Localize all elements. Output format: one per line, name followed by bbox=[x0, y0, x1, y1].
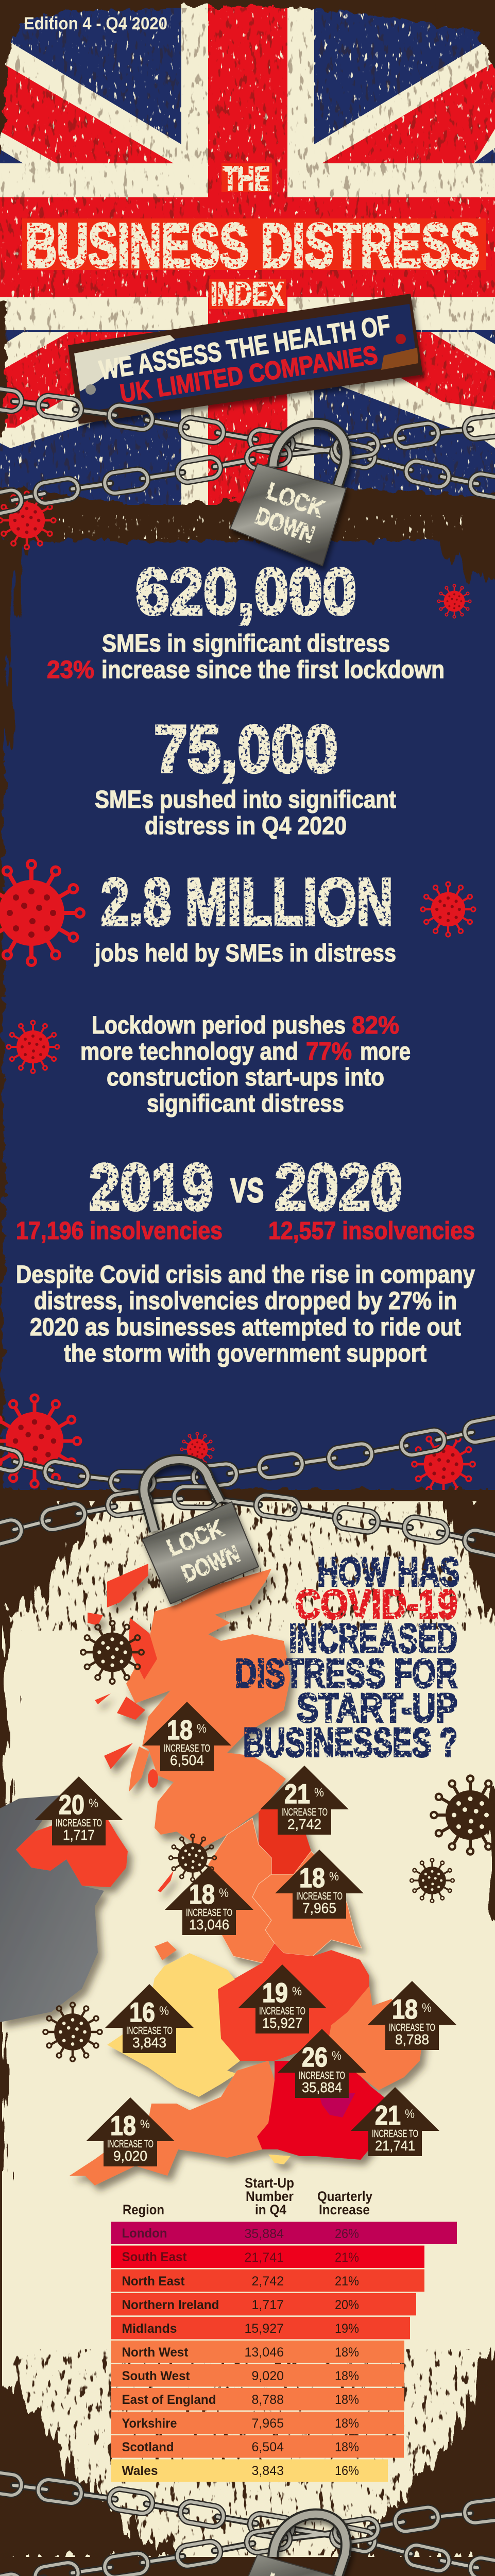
arrow: East of England: INCREASE TO bbox=[389, 2022, 435, 2033]
arrow: Midlands: 15,927 bbox=[262, 2015, 302, 2031]
row: Midlands: Midlands bbox=[122, 2321, 177, 2336]
arrow: South West: % bbox=[140, 2117, 150, 2131]
title: The Business Distress Index bbox=[22, 160, 486, 312]
arrow: Wales: 16 bbox=[129, 1997, 155, 2028]
arrow: Scotland: INCREASE TO bbox=[164, 1743, 210, 1754]
arrow: Scotland: 6,504 bbox=[170, 1752, 204, 1768]
row: South East bbox=[111, 2246, 424, 2268]
virus: right of 620,000 bbox=[437, 584, 471, 618]
row: Midlands: 19% bbox=[335, 2321, 359, 2336]
text: lockdown period: 77% bbox=[306, 1038, 352, 1065]
virus: map Hebrides bbox=[81, 1621, 144, 1684]
row: North East: 21% bbox=[335, 2274, 359, 2289]
row: North East: 2,742 bbox=[251, 2274, 284, 2289]
region: Isle of Man bbox=[158, 1871, 174, 1892]
arrow: Yorkshire: % bbox=[329, 1870, 339, 1884]
row: East of England: 8,788 bbox=[251, 2393, 284, 2407]
title: The Business Distress Index: THE bbox=[223, 160, 270, 197]
padlock: lower bbox=[230, 2514, 346, 2576]
arrow: South West: INCREASE TO bbox=[107, 2139, 153, 2150]
region: Isle of Wight bbox=[268, 2155, 291, 2164]
stat: 2.8 million bbox=[94, 865, 396, 967]
stat: 75,000: 75,000 bbox=[154, 712, 338, 786]
arrow: South West: 18 bbox=[110, 2111, 136, 2141]
row: London bbox=[111, 2222, 457, 2244]
text: despite covid crisis bbox=[16, 1261, 475, 1367]
padlock: middle bbox=[142, 1460, 259, 1604]
row: Wales: Wales bbox=[122, 2464, 158, 2478]
arrow: London: % bbox=[332, 2049, 342, 2063]
table header bbox=[123, 2175, 372, 2217]
arrow: Wales: % bbox=[159, 2004, 169, 2018]
row: Northern Ireland: 20% bbox=[335, 2298, 359, 2312]
row: London: London bbox=[122, 2226, 167, 2241]
row: Scotland: 18% bbox=[335, 2440, 359, 2454]
stat: 620,000: increase since the first lockdown bbox=[101, 656, 445, 684]
table header: Quarterly bbox=[317, 2189, 372, 2204]
virus: big left bbox=[0, 860, 84, 965]
panel: distressed union flag bbox=[0, 0, 495, 505]
row: South East: 21% bbox=[335, 2250, 359, 2265]
title: how has covid-19 increased distress: COVID-19 bbox=[295, 1581, 457, 1627]
table header: Increase bbox=[319, 2202, 370, 2217]
map of UK regions bbox=[0, 1564, 423, 2185]
row: Scotland: Scotland bbox=[122, 2440, 174, 2454]
arrow: Northern Ireland: % bbox=[89, 1797, 98, 1810]
row: Midlands: 15,927 bbox=[245, 2321, 284, 2336]
chains: lower bbox=[0, 2473, 495, 2576]
stat: 620,000: 23% bbox=[47, 656, 94, 684]
region: South West bbox=[70, 2061, 275, 2185]
arrow: Scotland: 18 bbox=[167, 1715, 193, 1745]
brown grunge around cream panel bbox=[0, 1494, 495, 2561]
arrow: North East: % bbox=[314, 1786, 324, 1800]
region: South East bbox=[257, 2061, 397, 2160]
row: South West: South West bbox=[122, 2369, 190, 2383]
arrow: South West bbox=[86, 2097, 175, 2166]
virus: map left lower bbox=[43, 2003, 102, 2061]
arrow: South East: % bbox=[405, 2107, 415, 2121]
arrow: Northern Ireland: 20 bbox=[59, 1790, 84, 1820]
stat: 620,000: 620,000 bbox=[135, 555, 356, 628]
arrow: North West: 18 bbox=[189, 1879, 215, 1910]
arrow: Wales bbox=[105, 1984, 194, 2053]
arrow: South East: INCREASE TO bbox=[372, 2128, 418, 2140]
row: East of England: East of England bbox=[122, 2393, 216, 2407]
arrow: London: INCREASE TO bbox=[299, 2070, 345, 2081]
title: how has covid-19 increased distress bbox=[235, 1549, 459, 1765]
row: South East: 21,741 bbox=[245, 2250, 284, 2265]
row: Wales: 16% bbox=[335, 2464, 359, 2478]
row: Yorkshire: 18% bbox=[335, 2416, 359, 2431]
stat: 2019 vs 2020: 2020 bbox=[275, 1150, 402, 1224]
row: London: 35,884 bbox=[245, 2227, 284, 2241]
stat: 75,000 bbox=[95, 712, 396, 840]
virus: lower right bbox=[412, 1433, 475, 1496]
arrow: North East bbox=[260, 1766, 349, 1835]
arrow: Scotland: % bbox=[197, 1722, 207, 1736]
arrow: North East: 21 bbox=[284, 1779, 310, 1809]
arrow: Wales: INCREASE TO bbox=[126, 2025, 173, 2037]
arrow: North West bbox=[165, 1866, 253, 1935]
virus: top left bbox=[0, 492, 56, 549]
row: East of England bbox=[111, 2388, 404, 2410]
arrow: Yorkshire: INCREASE TO bbox=[296, 1891, 343, 1902]
row: North West: 18% bbox=[335, 2345, 359, 2360]
row: Northern Ireland: 1,717 bbox=[251, 2298, 284, 2312]
region: Wales bbox=[107, 1953, 240, 2097]
arrow: South East: 21 bbox=[375, 2100, 401, 2131]
region: North West bbox=[208, 1818, 275, 1963]
arrow: London bbox=[278, 2029, 366, 2098]
arrow: London: 26 bbox=[302, 2042, 328, 2073]
row: North East bbox=[111, 2269, 424, 2292]
text: lockdown period: more bbox=[360, 1038, 411, 1065]
padlock: top: LOCK bbox=[263, 477, 328, 522]
text: edition: Edition 4 - Q4 2020 bbox=[24, 14, 167, 33]
region: East of England bbox=[328, 1986, 423, 2090]
sign: we assess the health: UK LIMITED COMPANIES bbox=[118, 340, 380, 408]
row: Midlands bbox=[111, 2317, 410, 2339]
text: lockdown period: 82% bbox=[352, 1012, 399, 1039]
row: Wales bbox=[111, 2460, 388, 2482]
stat: 2019 vs 2020: 12,557 insolvencies bbox=[268, 1217, 475, 1245]
region: Northern Ireland bbox=[16, 1818, 128, 1887]
arrow: Northern Ireland: INCREASE TO bbox=[56, 1818, 102, 1829]
arrow: Wales: 3,843 bbox=[132, 2035, 166, 2050]
row: East of England: 18% bbox=[335, 2393, 359, 2407]
arrow: Yorkshire: 7,965 bbox=[302, 1900, 336, 1916]
title: The Business Distress Index: INDEX bbox=[211, 276, 284, 312]
stat: 620,000: SMEs in significant distress bbox=[102, 630, 390, 657]
row: Scotland: 6,504 bbox=[251, 2440, 284, 2454]
arrow: East of England: 8,788 bbox=[395, 2031, 429, 2047]
row: South West: 18% bbox=[335, 2369, 359, 2383]
arrow: North West: % bbox=[219, 1886, 229, 1900]
stat: 2019 vs 2020: 2019 bbox=[89, 1150, 213, 1224]
table header: Number bbox=[246, 2189, 294, 2204]
stat: 620,000 bbox=[47, 555, 445, 684]
region: Anglesey bbox=[155, 1941, 177, 1960]
virus: map right big bbox=[431, 1775, 495, 1855]
region: Scotland bbox=[88, 1564, 291, 1848]
text: lockdown period: construction start-ups into bbox=[107, 1064, 384, 1091]
row: London: 26% bbox=[335, 2227, 359, 2241]
virus: small lower centre bbox=[180, 1432, 214, 1466]
padlock: middle: DOWN bbox=[178, 1540, 244, 1587]
rust streaks on navy panel bbox=[0, 531, 495, 1216]
arrow: South East bbox=[351, 2087, 439, 2156]
arrow: Scotland bbox=[143, 1702, 231, 1771]
padlock: middle: LOCK bbox=[163, 1515, 227, 1561]
sign: we assess the health bbox=[68, 294, 423, 424]
arrow: Yorkshire: 18 bbox=[299, 1863, 325, 1893]
arrow: North West: INCREASE TO bbox=[186, 1907, 232, 1919]
region: Ireland bbox=[0, 1795, 104, 2022]
row: South West bbox=[111, 2364, 404, 2386]
row: Scotland bbox=[111, 2435, 404, 2458]
arrow: East of England: 18 bbox=[392, 1994, 418, 2025]
rust border around flag bbox=[0, 0, 495, 546]
stat: 75,000: SMEs pushed into significant bbox=[95, 786, 396, 814]
stat: 2.8 million: 2.8 MILLION bbox=[101, 865, 393, 939]
row: North West bbox=[111, 2341, 404, 2363]
arrow: Midlands: INCREASE TO bbox=[259, 2006, 305, 2017]
arrow: Northern Ireland: 1,717 bbox=[63, 1827, 95, 1843]
sign: we assess the health: WE ASSESS THE HEALTH OF bbox=[97, 310, 392, 386]
chains: middle bbox=[0, 1417, 495, 1558]
region: North East bbox=[259, 1792, 311, 1874]
row: North West: 13,046 bbox=[245, 2345, 284, 2360]
stat: 2019 vs 2020: VS bbox=[230, 1171, 264, 1209]
panel: navy statistics background bbox=[3, 541, 495, 1490]
table: start-ups by region bbox=[111, 2175, 457, 2482]
chains: top bbox=[0, 389, 495, 518]
panel: cream map background bbox=[2, 1500, 495, 2557]
arrow: North West: 13,046 bbox=[189, 1917, 229, 1933]
row: North West: North West bbox=[122, 2345, 189, 2360]
region: Yorkshire bbox=[252, 1851, 362, 1956]
text: despite covid crisis: the storm with government support bbox=[64, 1340, 426, 1367]
text: lockdown period: Lockdown period pushes bbox=[92, 1012, 346, 1039]
virus: left of lockdown text bbox=[7, 1021, 59, 1073]
table header: in Q4 bbox=[255, 2202, 286, 2217]
virus: right of 2.8 million bbox=[421, 882, 475, 937]
stat: 2.8 million: jobs held by SMEs in distress bbox=[94, 940, 396, 967]
text: lockdown period: significant distress bbox=[147, 1090, 344, 1117]
row: North East: North East bbox=[122, 2274, 185, 2289]
row: Northern Ireland bbox=[111, 2293, 416, 2315]
row: Wales: 3,843 bbox=[251, 2464, 284, 2478]
row: Yorkshire: Yorkshire bbox=[122, 2416, 177, 2431]
arrow: London: 35,884 bbox=[302, 2079, 342, 2095]
arrow: East of England: % bbox=[422, 2001, 432, 2015]
table header: Start-Up bbox=[245, 2175, 294, 2191]
brown band above cream panel bbox=[0, 1490, 495, 1501]
padlock: top bbox=[230, 423, 346, 566]
stat: 2019 vs 2020 bbox=[16, 1150, 475, 1245]
region: Midlands bbox=[218, 1943, 369, 2061]
virus: map centre bbox=[169, 1834, 216, 1882]
region: London bbox=[319, 2093, 355, 2117]
text: lockdown period bbox=[80, 1012, 411, 1117]
arrow: North East: INCREASE TO bbox=[281, 1807, 328, 1818]
arrow: South West: 9,020 bbox=[113, 2148, 147, 2164]
virus: map right small bbox=[410, 1858, 454, 1903]
row: South East: South East bbox=[122, 2250, 187, 2264]
arrow: Yorkshire bbox=[275, 1850, 364, 1919]
row: Northern Ireland: Northern Ireland bbox=[122, 2298, 219, 2312]
text: lockdown period: more technology and bbox=[80, 1038, 298, 1065]
row: Yorkshire bbox=[111, 2412, 404, 2434]
padlock: top: DOWN bbox=[252, 502, 318, 548]
virus: big lower left bbox=[0, 1395, 81, 1487]
arrow: North East: 2,742 bbox=[287, 1816, 321, 1832]
stat: 75,000: distress in Q4 2020 bbox=[145, 812, 347, 840]
arrow: Midlands bbox=[238, 1964, 327, 2033]
flag speckles above navy panel bbox=[57, 515, 469, 539]
arrow: Midlands: 19 bbox=[262, 1978, 288, 2008]
row: Yorkshire: 7,965 bbox=[251, 2416, 284, 2431]
stat: 2019 vs 2020: 17,196 insolvencies bbox=[16, 1217, 223, 1245]
arrow: South East: 21,741 bbox=[375, 2138, 415, 2154]
arrow: Midlands: % bbox=[292, 1985, 302, 1998]
row: South West: 9,020 bbox=[251, 2369, 284, 2383]
table header: Region bbox=[123, 2202, 164, 2217]
arrow: East of England bbox=[368, 1981, 456, 2050]
arrow: Northern Ireland bbox=[35, 1776, 123, 1845]
title: how has covid-19 increased distress: START-UP bbox=[297, 1685, 457, 1731]
panel: brown band between sections bbox=[0, 2557, 495, 2576]
